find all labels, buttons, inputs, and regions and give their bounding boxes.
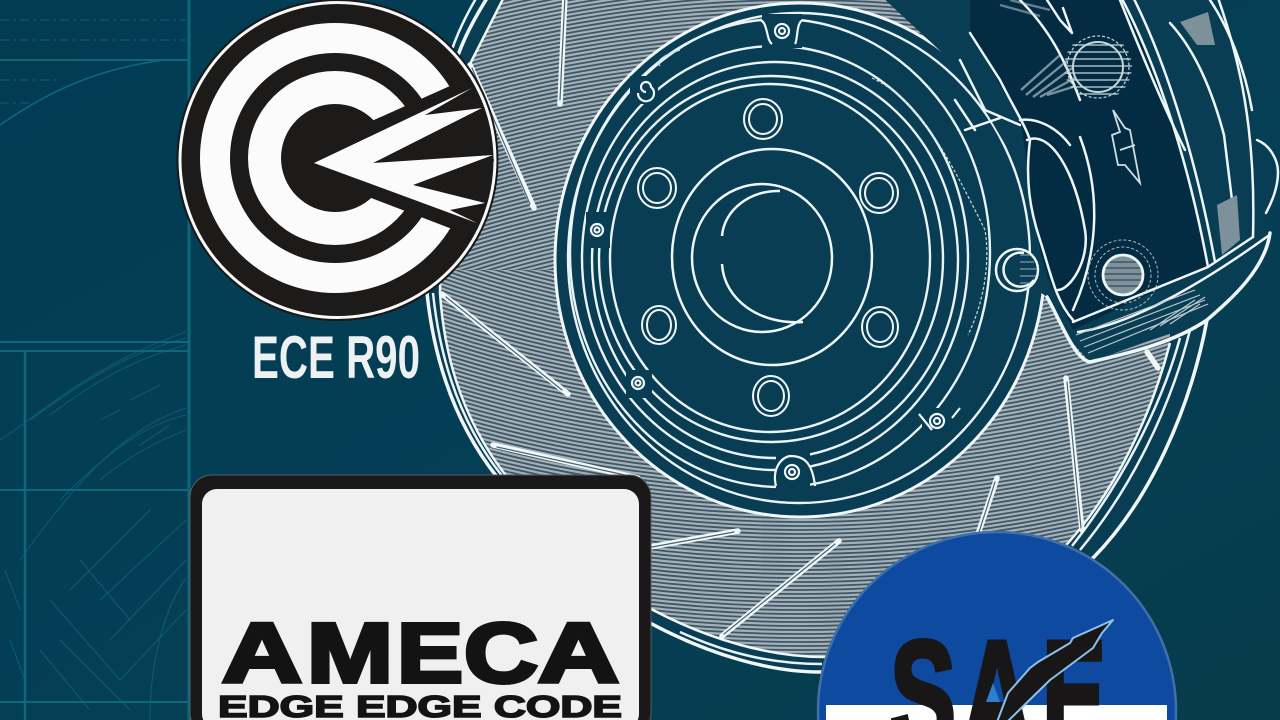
caliper dark body <box>970 0 1207 330</box>
ECE concentric C <box>200 23 494 293</box>
SAE blue roundel <box>818 532 1176 720</box>
disc hub <box>555 3 1045 517</box>
ECE burst <box>314 88 493 223</box>
AMECA card <box>190 475 651 720</box>
AMECA wordmark: E <box>397 606 463 700</box>
badge: SAE <box>818 532 1176 720</box>
hub concentric rings <box>568 13 1030 503</box>
caliper gray panels <box>1180 12 1240 255</box>
SAE blue highlight <box>986 683 1000 702</box>
AMECA wordmark: C <box>464 606 538 700</box>
disc slots <box>442 0 1158 636</box>
ECE label: ECE R90 <box>252 324 420 391</box>
AMECA wordmark <box>222 606 619 700</box>
SAE white band <box>826 705 1167 720</box>
hub etched detail <box>659 50 987 335</box>
caliper housing <box>880 0 1278 362</box>
SAE letters <box>890 609 1106 720</box>
AMECA wordmark: M <box>307 606 393 700</box>
bolt holes <box>638 99 898 416</box>
caliper emblem <box>1112 110 1140 183</box>
disc outer rim <box>427 0 1207 672</box>
hub centre bore <box>672 149 872 365</box>
AMECA wordmark: A <box>222 606 302 700</box>
brake disc <box>426 0 1209 674</box>
ECE roundel ring <box>178 0 498 320</box>
badge: ECE R90 <box>178 0 498 391</box>
disc face: machined grooves <box>441 0 1170 656</box>
caliper side bolt <box>996 249 1038 291</box>
rim inner band lines <box>433 0 1190 664</box>
rim lugs <box>586 14 960 490</box>
disc face edge line <box>440 0 1170 657</box>
SAE lightning slash <box>997 620 1113 720</box>
lower piston <box>1088 240 1158 310</box>
blueprint panel: left technical sketch <box>0 0 189 720</box>
badge: AMECA <box>190 475 651 720</box>
brake caliper <box>880 0 1278 362</box>
upper piston <box>1000 0 1132 98</box>
AMECA wordmark: A <box>538 606 619 700</box>
caliper outlines <box>955 0 1278 362</box>
caliper rail hatching <box>1076 290 1208 353</box>
